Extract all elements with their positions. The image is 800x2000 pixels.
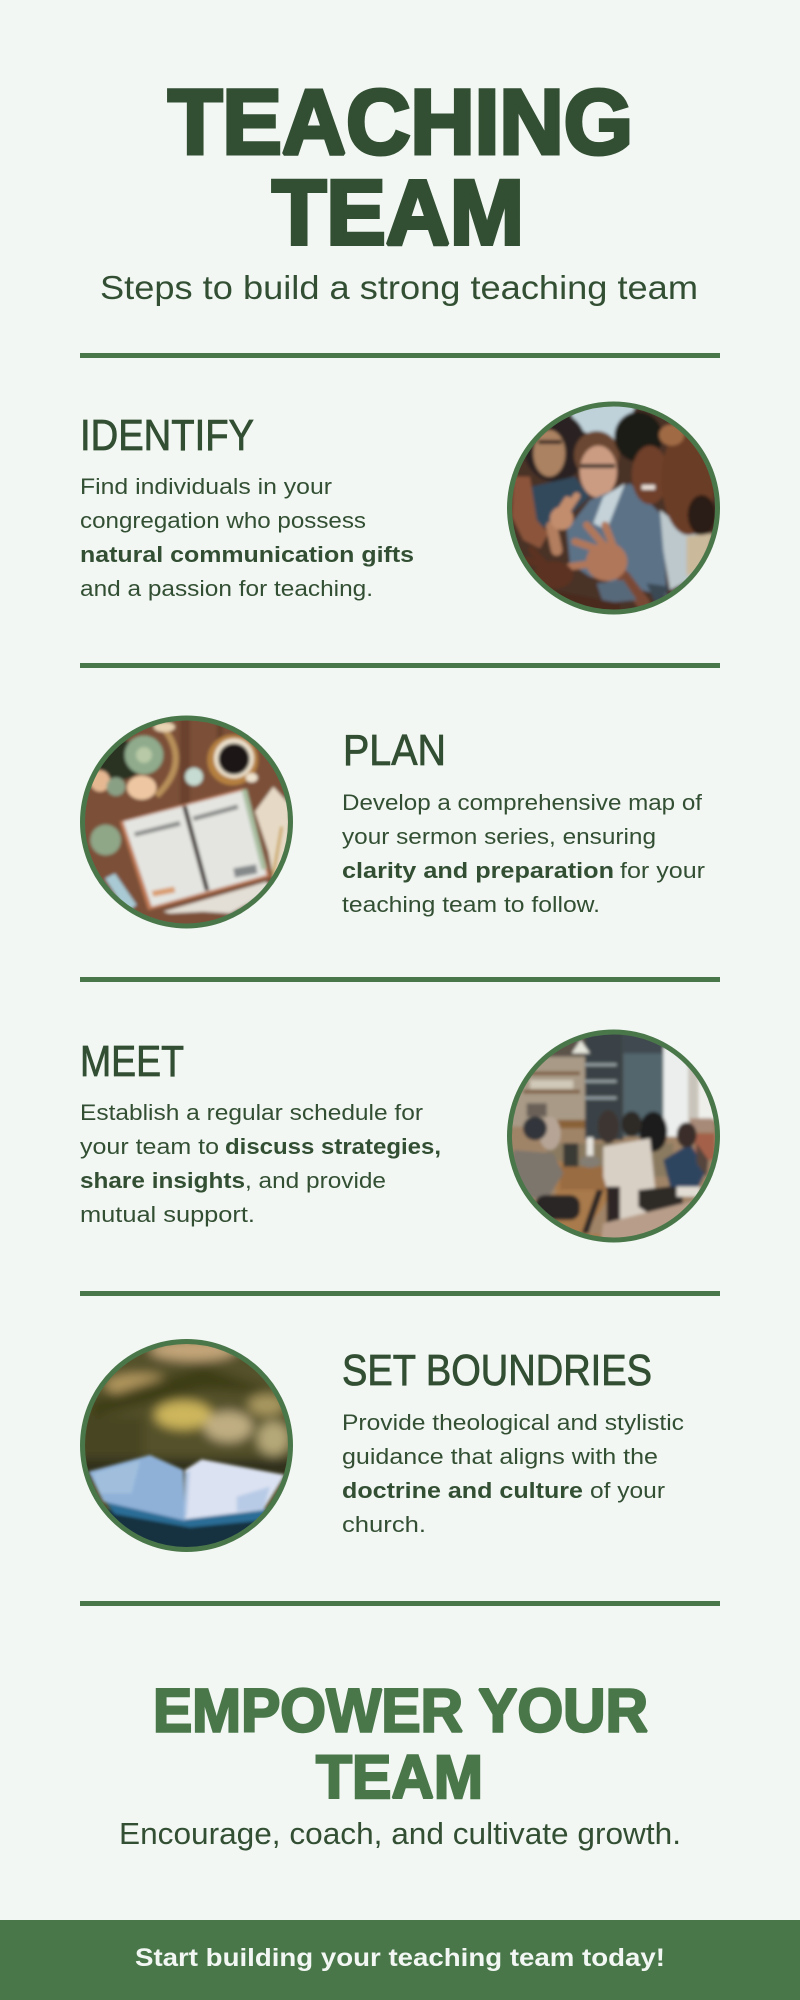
photo: team meeting at table bbox=[503, 1027, 723, 1247]
photo: open bible bbox=[80, 1339, 293, 1552]
text block: meet: share insights bbox=[80, 1168, 245, 1193]
panel: set boundries bbox=[80, 1339, 684, 1552]
closing subtitle: Encourage, coach, and cultivate growth. bbox=[119, 1817, 681, 1851]
photo: planner on desk bbox=[77, 712, 297, 932]
closing heading bbox=[153, 1676, 648, 1811]
text block: plan bbox=[342, 790, 706, 917]
text block: plan: Develop a comprehensive map of bbox=[342, 790, 703, 815]
heading: meet: MEET bbox=[80, 1037, 184, 1086]
title: TEAM bbox=[272, 162, 524, 264]
text block: meet bbox=[80, 1100, 441, 1227]
heading: plan: PLAN bbox=[343, 726, 446, 775]
footer banner: Start building your teaching team today! bbox=[135, 1944, 665, 1972]
text block: set boundries bbox=[342, 1410, 684, 1537]
text block: set boundries: doctrine and culture bbox=[342, 1478, 583, 1503]
subtitle: Steps to build a strong teaching team bbox=[100, 269, 698, 306]
text block: set boundries: guidance that aligns with the bbox=[342, 1444, 658, 1469]
text block: set boundries: church. bbox=[342, 1512, 426, 1537]
text block: meet: Establish a regular schedule for bbox=[80, 1100, 424, 1125]
heading: set boundries: SET BOUNDRIES bbox=[342, 1346, 652, 1395]
photo: team discussion bbox=[503, 398, 723, 620]
text block: identify bbox=[80, 474, 414, 601]
text block: identify: congregation who possess bbox=[80, 508, 366, 533]
heading: identify: IDENTIFY bbox=[80, 411, 254, 460]
text block: identify: natural communication gifts bbox=[80, 542, 414, 567]
footer banner bbox=[0, 1920, 800, 2000]
closing heading: EMPOWER YOUR bbox=[153, 1676, 648, 1744]
title bbox=[168, 72, 633, 264]
text block: identify: Find individuals in your bbox=[80, 474, 333, 499]
text block: set boundries: of your bbox=[590, 1478, 666, 1503]
text block: plan: clarity and preparation bbox=[342, 858, 614, 883]
text block: meet: your team to bbox=[80, 1134, 219, 1159]
panel: plan bbox=[77, 712, 706, 932]
text block: identify: and a passion for teaching. bbox=[80, 576, 373, 601]
text block: plan: for your bbox=[620, 858, 706, 883]
closing heading: TEAM bbox=[316, 1743, 483, 1811]
panel: meet bbox=[80, 1027, 723, 1247]
title: TEACHING bbox=[168, 72, 633, 174]
panel: identify bbox=[80, 398, 723, 620]
text block: plan: your sermon series, ensuring bbox=[342, 824, 656, 849]
text block: set boundries: Provide theological and stylistic bbox=[342, 1410, 684, 1435]
text block: meet: mutual support. bbox=[80, 1202, 255, 1227]
text block: plan: teaching team to follow. bbox=[342, 892, 600, 917]
text block: meet: , and provide bbox=[245, 1168, 386, 1193]
text block: meet: discuss strategies, bbox=[225, 1134, 441, 1159]
